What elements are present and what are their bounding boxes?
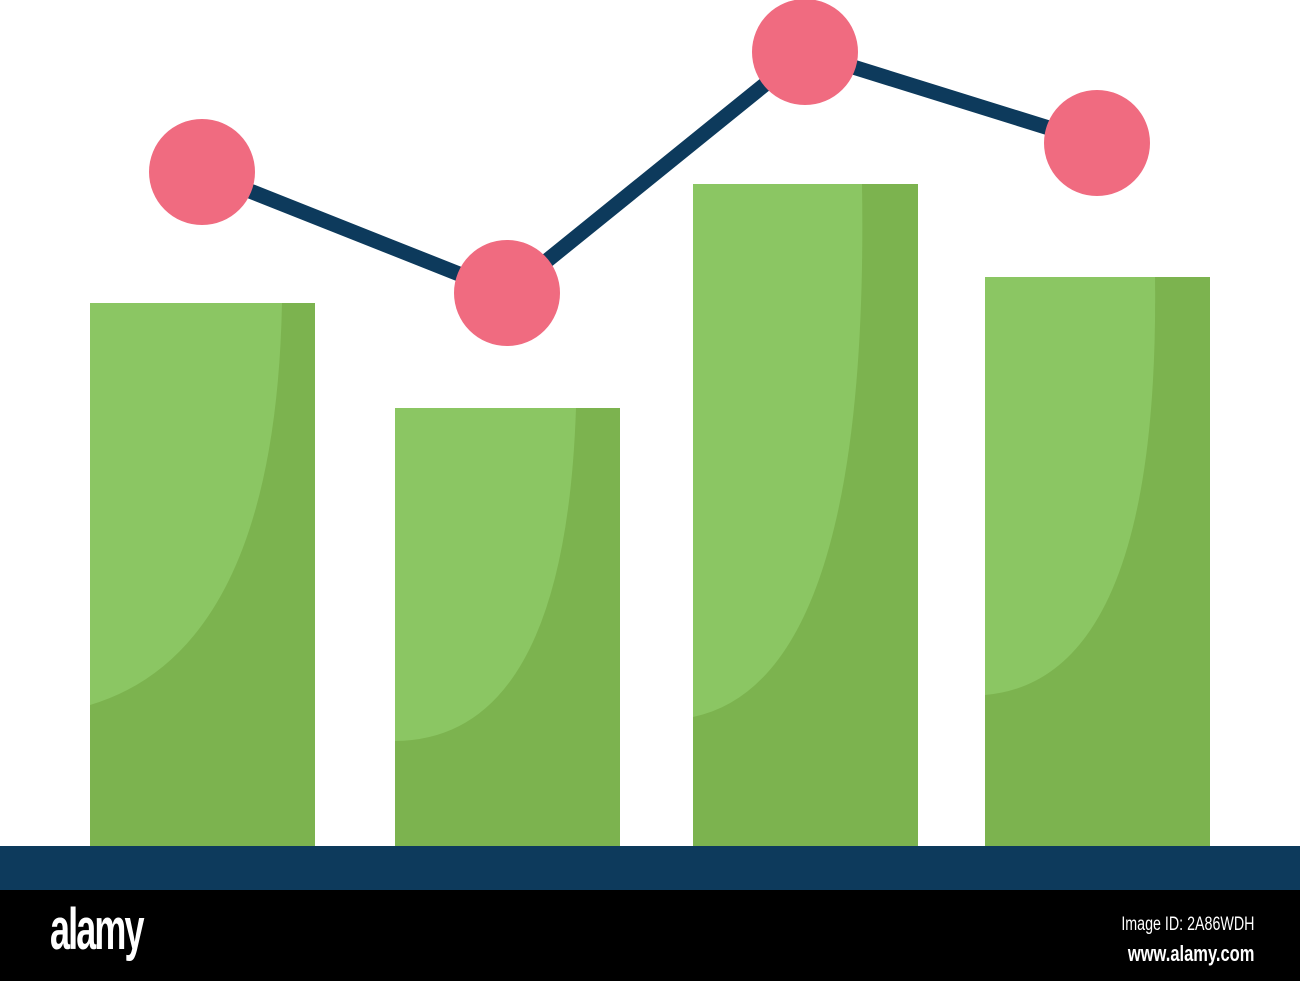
footer xyxy=(0,890,1300,981)
footer id: Image ID: 2A86WDH xyxy=(1121,914,1254,935)
footer logo: alamy xyxy=(50,897,143,962)
bar 2 xyxy=(395,408,620,846)
footer id xyxy=(1121,914,1254,966)
trend line xyxy=(202,52,1097,293)
data points xyxy=(149,0,1150,346)
footer id: www.alamy.com xyxy=(1127,941,1254,966)
bar 3 xyxy=(693,184,918,846)
bar 4 xyxy=(985,277,1210,846)
bar 1 xyxy=(90,303,315,846)
baseline xyxy=(0,846,1300,890)
